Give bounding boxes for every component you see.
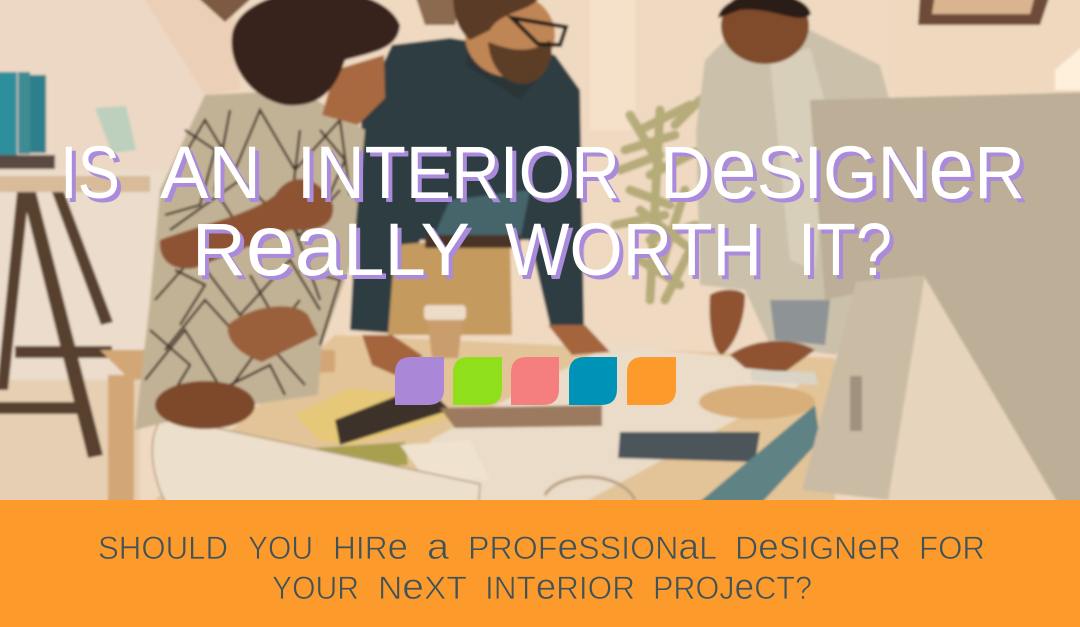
colour swatches (295, 385, 602, 480)
title: AN (160, 131, 261, 214)
subtitle: a (427, 526, 449, 567)
title: IT? (798, 208, 892, 291)
trestle table (0, 176, 150, 458)
subtitle: YOUR (272, 570, 359, 606)
right colleague hands (710, 290, 745, 355)
subtitle (98, 526, 985, 607)
subtitle: YOU (248, 530, 313, 566)
bench (100, 350, 335, 510)
title (60, 120, 1025, 294)
plant (615, 100, 700, 300)
title: WORTH (505, 208, 762, 291)
subtitle: SHOULD (98, 530, 228, 566)
orange footer band (0, 500, 1080, 627)
rolled blueprint (152, 417, 480, 510)
subtitle: DeSIGNeR (735, 526, 901, 567)
square: blue (569, 357, 617, 405)
subtitle: NeXT (378, 566, 467, 607)
central man (350, 0, 584, 335)
title: IS (60, 131, 120, 214)
title: DeSIGNeR (660, 120, 1025, 217)
square: purple (395, 357, 444, 405)
central man hands (362, 325, 610, 375)
subtitle: PROJeCT? (653, 566, 812, 607)
shelf items on left (0, 72, 136, 169)
title: ReaLLY (192, 197, 470, 294)
right colleague (696, 0, 892, 355)
square: green (453, 357, 502, 405)
title: INTERIOR (297, 131, 620, 214)
subtitle: FOR (919, 530, 985, 566)
skylight windows (195, 0, 1080, 90)
right colleague second hand (730, 341, 815, 372)
monitor (802, 92, 1080, 510)
square: orange (627, 357, 676, 405)
coffee cup (424, 305, 466, 358)
subtitle: PROFeSSIONaL (468, 526, 717, 567)
left woman (135, 0, 400, 430)
subtitle: HIRe (333, 526, 408, 567)
colour squares row (395, 357, 676, 405)
square: pink (511, 357, 559, 405)
table top and blueprints (155, 335, 835, 510)
subtitle: INTeRIOR (485, 566, 635, 607)
phone and tray (699, 370, 818, 419)
